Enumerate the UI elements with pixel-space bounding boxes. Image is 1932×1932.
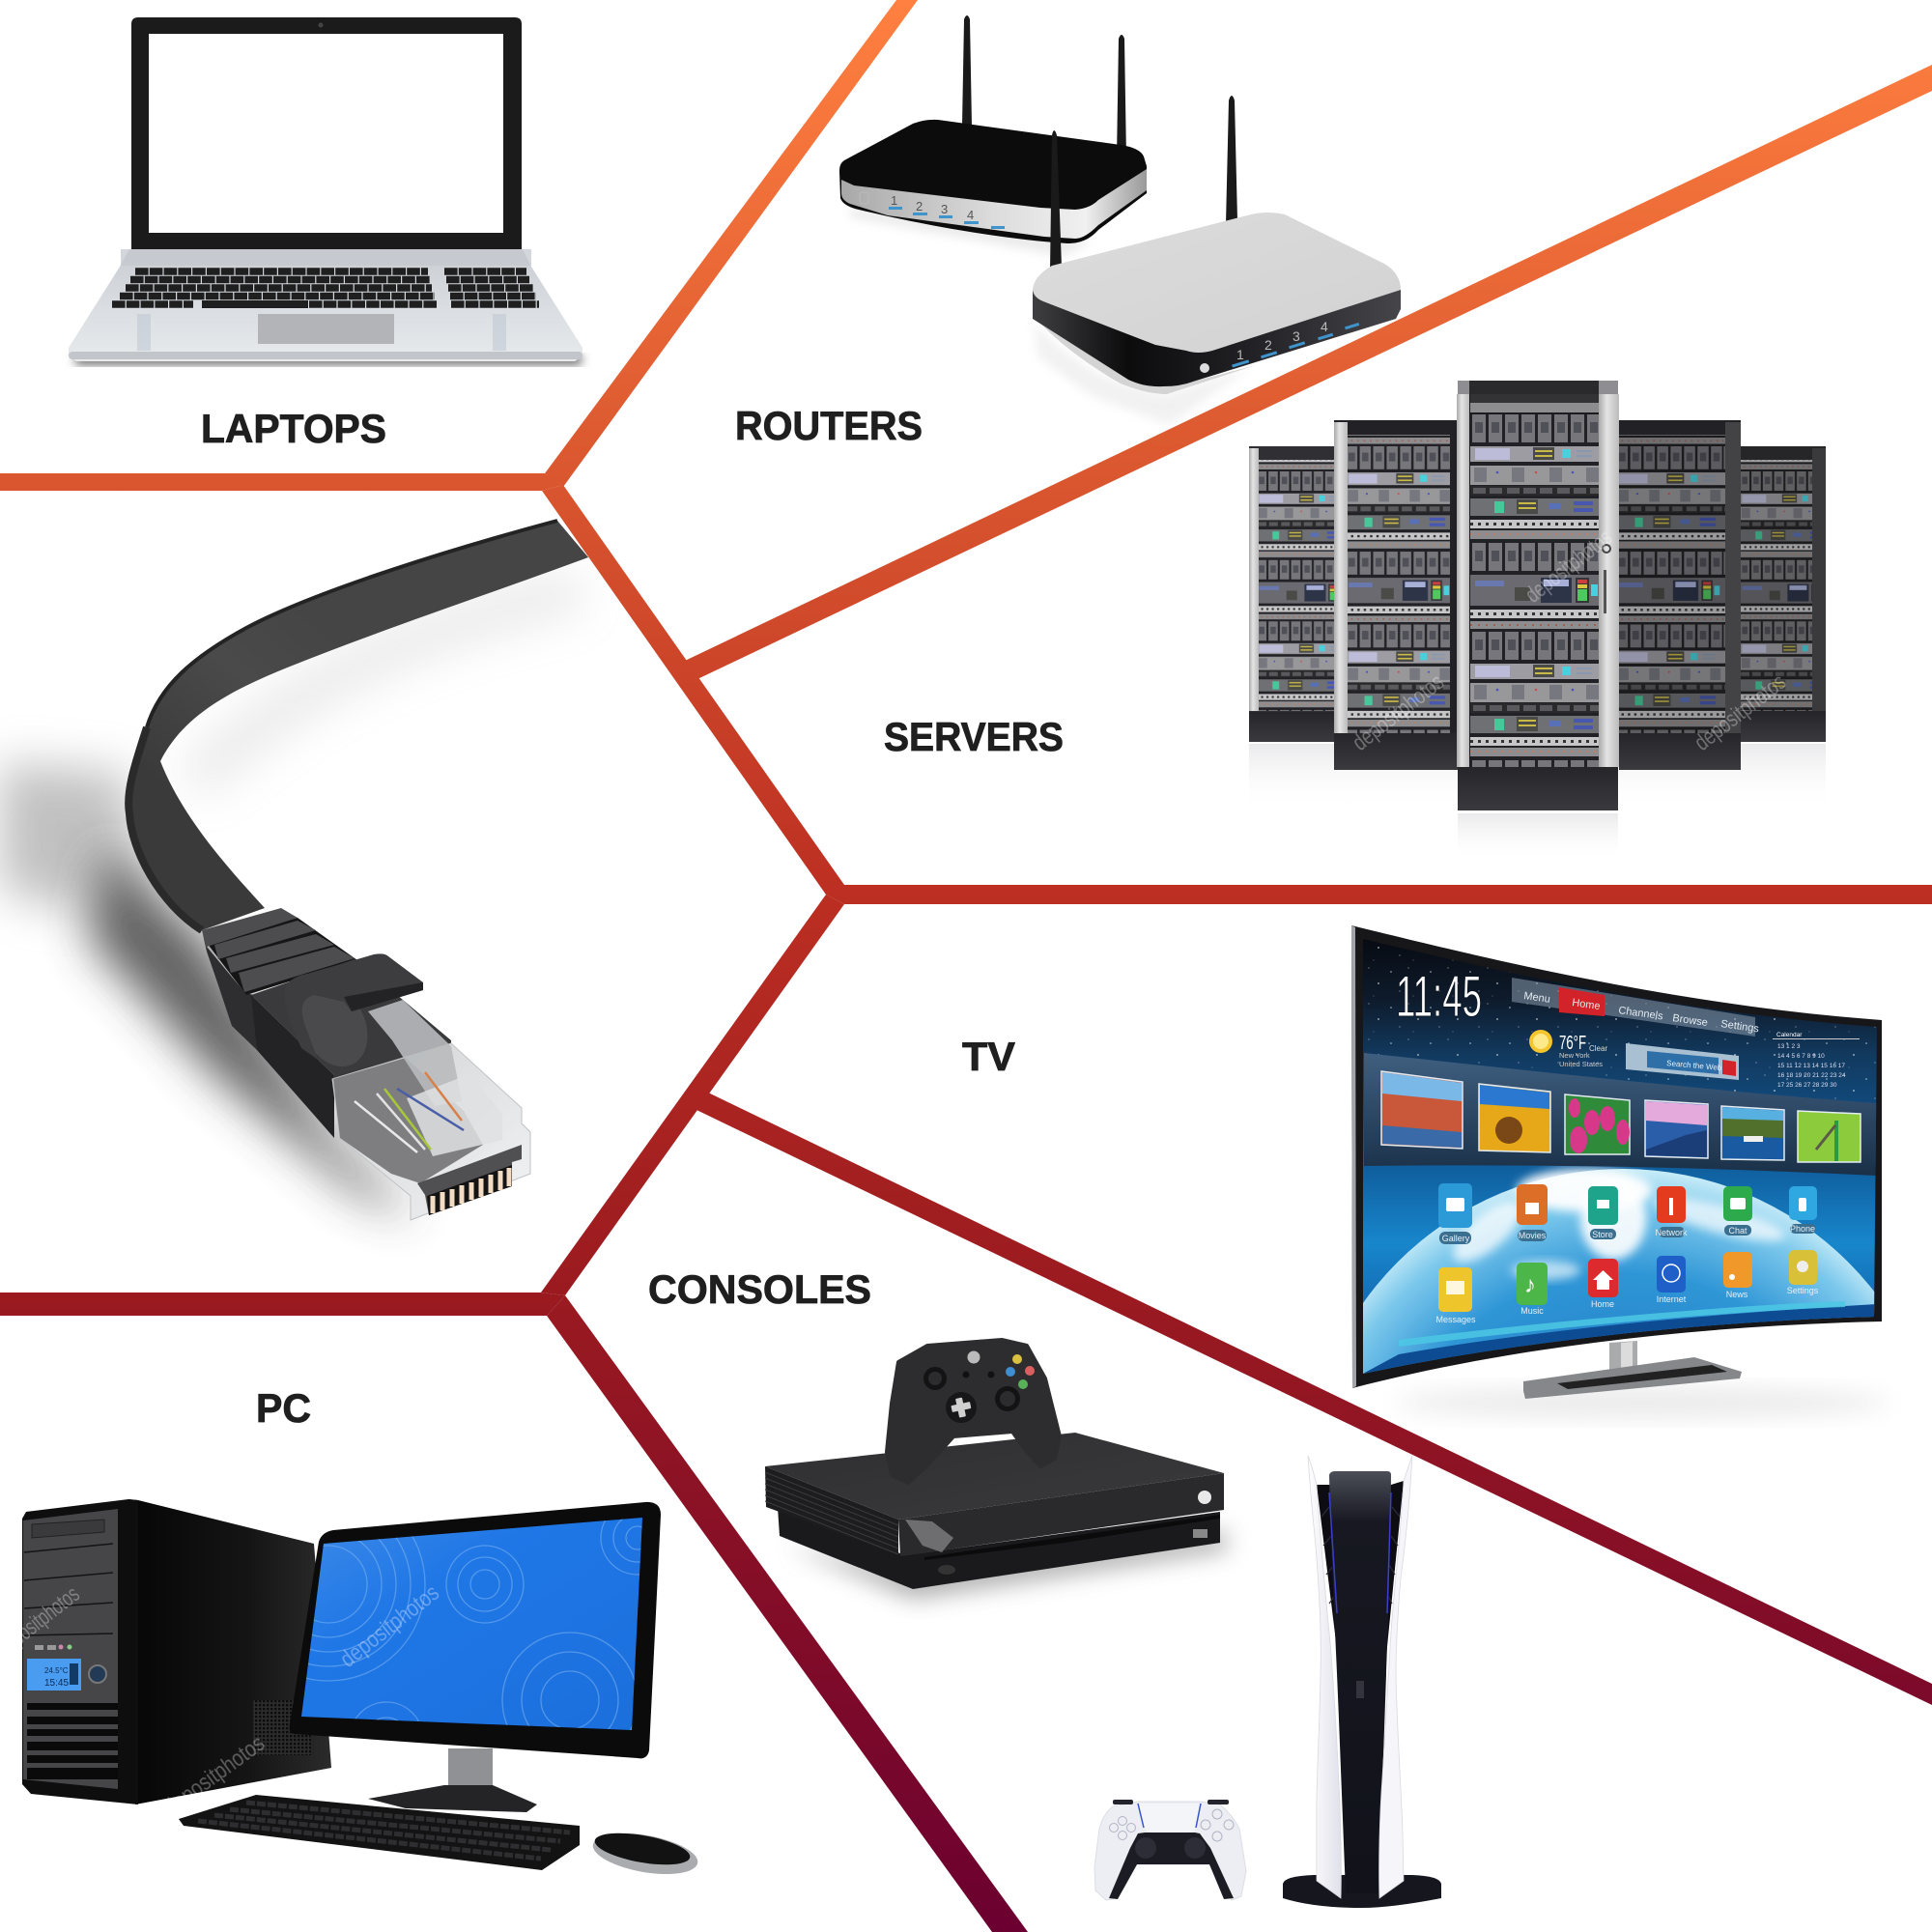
rack: inner left bbox=[1334, 420, 1458, 770]
illustration: black router: 4 bbox=[967, 208, 974, 222]
cable: gold contacts bbox=[417, 1145, 522, 1215]
tv: menu bar: Settings bbox=[1720, 1018, 1760, 1036]
illustration: ethernet cable bbox=[0, 521, 588, 1220]
tv: app icons: Music bbox=[1520, 1306, 1544, 1316]
illustration: mouse bbox=[590, 1827, 700, 1881]
illustration: server racks bbox=[1249, 381, 1826, 862]
tv: weather: 76°F bbox=[1559, 1033, 1586, 1054]
stock watermarks: depositphotos bbox=[335, 1579, 444, 1673]
rack: center bbox=[1457, 381, 1619, 810]
illustration: curved smart TV bbox=[1351, 925, 1882, 1421]
heading: routers: ROUTERS bbox=[735, 403, 923, 448]
tv: calendar: 17 25 26 27 28 29 30 bbox=[1777, 1082, 1837, 1089]
tv: menu bar: Home bbox=[1572, 997, 1601, 1012]
tv: calendar: 13 1 2 3 bbox=[1777, 1043, 1801, 1050]
tv: app icons: Messages bbox=[1435, 1315, 1476, 1324]
stock watermarks: depositphotos bbox=[1348, 668, 1449, 756]
tv: app icons: Store bbox=[1592, 1230, 1613, 1239]
illustration: white router: 3 bbox=[1293, 328, 1300, 344]
heading: consoles: CONSOLES bbox=[648, 1266, 871, 1312]
tv: app icons: Internet bbox=[1657, 1294, 1687, 1304]
cable: clear plug bbox=[332, 1000, 530, 1220]
tv: calendar: 15 11 12 13 14 15 16 17 bbox=[1777, 1063, 1845, 1069]
illustration: black router bbox=[839, 15, 1147, 256]
tv: weather: Clear bbox=[1589, 1044, 1607, 1053]
tv: menu bar bbox=[1512, 978, 1760, 1037]
illustration: desktop monitor bbox=[290, 1501, 661, 1812]
illustration: white router: 1 bbox=[1236, 347, 1244, 362]
illustration: xbox console bbox=[765, 1433, 1227, 1599]
tv: weather bbox=[1529, 1030, 1607, 1068]
illustration: playstation controller bbox=[1094, 1800, 1246, 1900]
tv: weather: New York bbox=[1559, 1051, 1590, 1060]
tv: app icons: Movies bbox=[1519, 1231, 1547, 1240]
illustration: black router: 1 bbox=[891, 193, 897, 208]
heading: laptops: LAPTOPS bbox=[201, 406, 386, 451]
illustration: black router: 2 bbox=[916, 199, 923, 213]
illustration: desktop tower: 24.5°C bbox=[44, 1666, 69, 1675]
tv: calendar bbox=[1773, 1032, 1860, 1089]
illustration: desktop tower bbox=[22, 1499, 331, 1804]
tv: app icons: Network bbox=[1655, 1228, 1688, 1237]
tv: menu bar: Browse bbox=[1672, 1012, 1709, 1029]
tv: app icons: Gallery bbox=[1442, 1234, 1470, 1243]
heading: servers: SERVERS bbox=[884, 714, 1064, 759]
tv: photo tiles bbox=[1381, 1071, 1861, 1162]
illustration: desktop tower: 15:45 bbox=[44, 1678, 69, 1689]
illustration: black router: 3 bbox=[941, 202, 948, 216]
tv: app icons: Chat bbox=[1728, 1226, 1747, 1236]
tv: menu bar: Menu bbox=[1523, 990, 1551, 1006]
illustration: white router: 2 bbox=[1264, 337, 1272, 353]
tv: menu bar: Channels bbox=[1618, 1005, 1664, 1023]
tv: app icons: Settings bbox=[1787, 1286, 1819, 1295]
stock watermarks: depositphotos bbox=[159, 1730, 270, 1821]
tv: app icons: Home bbox=[1591, 1299, 1614, 1309]
illustration: white router: 4 bbox=[1321, 319, 1328, 334]
heading: pc: PC bbox=[256, 1385, 311, 1431]
tv: app icons: Phone bbox=[1790, 1224, 1815, 1234]
stock watermarks: depositphotos bbox=[1520, 525, 1617, 609]
stock watermarks bbox=[0, 525, 1791, 1821]
rack: far right bbox=[1741, 446, 1826, 742]
heading: tv: TV bbox=[962, 1034, 1015, 1079]
rack: far left bbox=[1249, 446, 1334, 742]
tv: clock: 11:45 bbox=[1396, 964, 1482, 1029]
illustration: laptop bbox=[69, 17, 582, 364]
tv: search box bbox=[1626, 1043, 1739, 1080]
tv: calendar: 16 18 19 20 21 22 23 24 bbox=[1777, 1072, 1846, 1079]
tv: calendar: 14 4 5 6 7 8 9 10 bbox=[1777, 1053, 1825, 1060]
tv: app icons: ♪ bbox=[1524, 1272, 1536, 1298]
illustration: keyboard bbox=[179, 1795, 580, 1870]
tv: calendar: Calendar bbox=[1776, 1032, 1803, 1038]
illustration: xbox controller bbox=[887, 1340, 1060, 1483]
cable: strain relief ridges bbox=[202, 908, 357, 1050]
rack: inner right bbox=[1619, 420, 1741, 770]
tv: app icons: News bbox=[1726, 1290, 1748, 1299]
illustration: white router bbox=[1033, 96, 1401, 425]
tv: search box: Search the Web bbox=[1666, 1059, 1722, 1072]
tv: weather: United States bbox=[1559, 1060, 1603, 1068]
stock watermarks: depositphotos bbox=[1690, 668, 1791, 756]
tv: app icons bbox=[1435, 1183, 1819, 1324]
illustration: playstation console bbox=[1283, 1456, 1441, 1908]
